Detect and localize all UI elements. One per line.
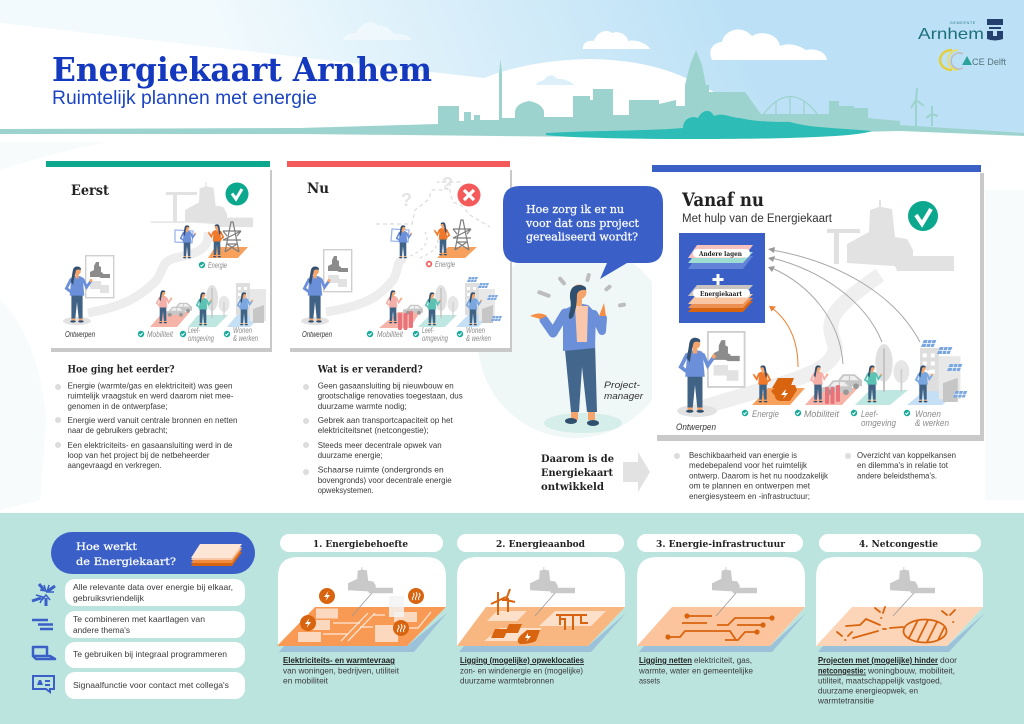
panel: Hoe werkt de Energiekaart: de Energiekaart? xyxy=(76,556,176,568)
layers diagram xyxy=(679,233,765,323)
text block: Hoe ging het eerder xyxy=(55,364,238,470)
figure: mobiliteit xyxy=(795,365,862,419)
text block: Hoe ging het eerder: Energie (warmte/gas en elektriciteit) was geen xyxy=(68,380,233,390)
row: kaartlagen: andere thema's xyxy=(73,625,130,635)
card 3: Energie-infrastructuur: 3. Energie-infrastructuur xyxy=(656,539,786,550)
row: signaalfunctie: Signaalfunctie voor contact met collega's xyxy=(73,680,229,690)
card 4: Netcongestie: warmtetransitie xyxy=(817,696,874,706)
figure: mobiliteit: Mobiliteit xyxy=(377,330,404,339)
icon: chat xyxy=(33,676,54,692)
text block: Vanaf nu bullets: Overzicht van koppelkansen xyxy=(857,450,956,460)
figure: ontwerper xyxy=(63,256,114,339)
header skyline illustration xyxy=(0,0,1024,142)
text block: Vanaf nu bullets: en dilemma's in relatie tot xyxy=(857,460,949,470)
project manager figure xyxy=(530,273,644,433)
text: Daarom is de Energiekaart ontwikkeld: ontwikkeld xyxy=(541,481,605,493)
text block: Vanaf nu bullets: om te plannen en ontwerpen met xyxy=(689,480,811,490)
row: programmeren: Te gebruiken bij integraal programmeren xyxy=(73,649,227,659)
row: signaalfunctie xyxy=(65,672,245,699)
figure: leefomgeving: omgeving xyxy=(861,418,896,428)
text block: Wat is er veranderd xyxy=(303,364,463,495)
row: data xyxy=(65,579,245,606)
project manager figure: manager xyxy=(604,391,644,402)
card 1: Energiebehoefte: Elektriciteits- en warmtevraag xyxy=(283,655,395,665)
text block: Hoe ging het eerder: aangevraagd en verkregen. xyxy=(68,460,162,470)
road and dashed city xyxy=(326,174,490,312)
figure: wonen en werken: & werken xyxy=(915,418,949,428)
text block: Hoe ging het eerder: loop van het project bij de netbeheerder xyxy=(68,450,210,460)
text block: Wat is er veranderd: duurzame energie; xyxy=(318,450,383,460)
figure: wonen en werken: Wonen xyxy=(466,326,485,335)
row: kaartlagen xyxy=(65,611,245,638)
card 4: Netcongestie: 4. Netcongestie xyxy=(859,539,938,550)
card 3: Energie-infrastructuur: elektriciteit, gas, xyxy=(694,655,752,665)
figure: energie xyxy=(175,222,248,270)
heading: Vanaf nu: Vanaf nu xyxy=(681,189,764,211)
text block: Hoe ging het eerder: genomen in de ontwerpfase; xyxy=(68,401,168,411)
card 2: Energieaanbod xyxy=(457,534,626,686)
speech bubble: gerealiseerd wordt? xyxy=(526,230,638,244)
card 4: Netcongestie: door xyxy=(940,655,957,665)
card 3: Energie-infrastructuur: Ligging netten xyxy=(639,655,692,665)
logo: CE Delft: CE Delft xyxy=(972,57,1006,68)
figure: mobiliteit: Mobiliteit xyxy=(147,330,174,339)
speech bubble: Hoe zorg ik er nu xyxy=(526,203,624,216)
figure: ontwerper: Ontwerpen xyxy=(302,330,332,339)
row: data: Alle relevante data over energie bij elkaar, xyxy=(73,582,233,592)
figure: leefomgeving: Leef- xyxy=(422,326,434,335)
figure: energie: Energie xyxy=(752,409,779,419)
card 3: Energie-infrastructuur xyxy=(637,534,806,686)
clouds xyxy=(343,22,827,85)
text block: Vanaf nu bullets xyxy=(674,450,956,501)
text block: Wat is er veranderd: Wat is er veranderd? xyxy=(317,364,423,376)
card 4: Netcongestie: duurzame energieopwek, en xyxy=(818,686,918,696)
figure: wonen en werken: Wonen xyxy=(915,409,941,419)
figure: ontwerper xyxy=(676,332,745,433)
text block: Wat is er veranderd: Gebrek aan transportcapaciteit op het xyxy=(318,415,453,425)
figure: wonen en werken: & werken xyxy=(233,334,258,343)
text block: Wat is er veranderd: grootschalige renovaties toegestaan, dus xyxy=(318,390,463,400)
figure: energie xyxy=(742,365,805,419)
text block: Hoe ging het eerder: Een elektriciteits- en gasaansluiting werd in de xyxy=(68,440,233,450)
text block: Wat is er veranderd: elektriciteitsnet (netcongestie); xyxy=(318,425,429,435)
text block: Hoe ging het eerder: naar de gebruikers gebracht; xyxy=(68,425,168,435)
text block: Vanaf nu bullets: medebepalend voor het ruimtelijk xyxy=(689,460,808,470)
figure: wonen en werken xyxy=(904,340,967,428)
layers diagram: Andere lagen xyxy=(698,250,742,258)
figure: wonen en werken: & werken xyxy=(466,334,491,343)
card 1: Energiebehoefte: 1. Energiebehoefte xyxy=(313,539,408,550)
logo: gemeente Arnhem: GEMEENTE xyxy=(950,21,976,25)
text block: Hoe ging het eerder: Hoe ging het eerder? xyxy=(68,364,174,376)
figure: leefomgeving: omgeving xyxy=(422,334,448,343)
figure: energie xyxy=(391,220,477,269)
panel: Hoe werkt de Energiekaart xyxy=(51,532,255,574)
text block: Vanaf nu bullets: andere beleidsthema's. xyxy=(857,470,937,480)
heading: Nu: Nu xyxy=(307,181,329,197)
text block: Wat is er veranderd: Geen gasaansluiting bij nieuwbouw en xyxy=(318,380,454,390)
text block: Wat is er veranderd: Schaarse ruimte (ondergronds en xyxy=(318,464,444,474)
card 2: Energieaanbod: zon- en windenergie en (mogelijke) xyxy=(460,666,583,676)
icon: check xyxy=(908,201,938,231)
card 4: Netcongestie: utiliteit, maatschappelijk vastgoed, xyxy=(818,676,942,686)
text: Daarom is de Energiekaart ontwikkeld: Daarom is de xyxy=(541,453,614,465)
project manager figure: Project- xyxy=(604,380,640,391)
text: Daarom is de Energiekaart ontwikkeld: Energiekaart xyxy=(541,467,613,479)
figure: wonen en werken xyxy=(224,283,266,343)
figure: leefomgeving xyxy=(851,344,909,428)
text block: Wat is er veranderd: opweksystemen. xyxy=(318,485,374,495)
figure: mobiliteit xyxy=(138,290,192,339)
icon: laptop xyxy=(33,647,55,659)
heading: Eerst: Eerst xyxy=(71,183,109,199)
arrows to layers xyxy=(768,247,920,367)
figure: leefomgeving xyxy=(180,285,230,343)
text block: Wat is er veranderd: Steeds meer decentrale opwek van xyxy=(318,440,442,450)
subtitle: Ruimtelijk plannen met energie xyxy=(52,88,317,109)
icon: lines xyxy=(32,620,53,629)
arrow xyxy=(623,452,650,492)
speech bubble xyxy=(503,186,663,279)
road and gray city xyxy=(695,200,954,410)
card 1: Energiebehoefte xyxy=(277,534,447,686)
figure: energie: Energie xyxy=(435,260,455,269)
logo: gemeente Arnhem xyxy=(918,19,1003,43)
subheading: Met hulp van de Energiekaart xyxy=(682,213,833,225)
figure: ontwerper xyxy=(301,250,352,339)
panel: Nu xyxy=(287,161,512,352)
row: data: gebruiksvriendelijk xyxy=(73,593,145,603)
road and dashed city: ? xyxy=(401,190,412,210)
icon: arrows inward xyxy=(32,584,55,606)
figure: leefomgeving xyxy=(413,285,458,343)
figure: energie: Energie xyxy=(208,261,227,270)
card 2: Energieaanbod: duurzame warmtebronnen xyxy=(460,676,554,686)
figure: leefomgeving: Leef- xyxy=(188,326,200,335)
figure: ontwerper: Ontwerpen xyxy=(676,422,716,433)
card 4: Netcongestie: netcongestie: xyxy=(818,666,866,676)
text block: Hoe ging het eerder: Energie werd vanuit centrale bronnen en netten xyxy=(68,415,238,425)
card 4: Netcongestie: woningbouw, mobiliteit, xyxy=(867,666,955,676)
figure: leefomgeving: omgeving xyxy=(188,334,214,343)
figure: ontwerper: Ontwerpen xyxy=(65,330,95,339)
logo: gemeente Arnhem: Arnhem xyxy=(918,26,984,43)
text block: Vanaf nu bullets: ontwerp. Daarom is het nu noodzakelijk xyxy=(689,470,829,480)
icon: layers xyxy=(191,544,242,566)
panel: Hoe werkt de Energiekaart: Hoe werkt xyxy=(76,541,138,553)
text block: Hoe ging het eerder: ruimtelijk vraagstuk en werd daarom niet mee- xyxy=(68,390,234,400)
text block: Vanaf nu bullets: energiesysteem en -infrastructuur; xyxy=(689,491,810,501)
speech bubble: voor dat ons project xyxy=(525,217,640,230)
title: Energiekaart Arnhem xyxy=(52,50,432,89)
figure: wonen en werken: Wonen xyxy=(233,326,252,335)
panel: Vanaf nu xyxy=(652,165,984,441)
text block: Wat is er veranderd: duurzame warmte nodig; xyxy=(318,401,407,411)
text block: Vanaf nu bullets: Beschikbaarheid van energie is xyxy=(689,450,797,460)
panel: Eerst xyxy=(46,161,272,352)
card 2: Energieaanbod: Ligging (mogelijke) opweklocaties xyxy=(460,655,584,665)
figure: mobiliteit: Mobiliteit xyxy=(804,409,839,419)
card 3: Energie-infrastructuur: assets xyxy=(639,676,660,686)
figure: wonen en werken xyxy=(456,277,502,343)
card 4: Netcongestie xyxy=(816,534,985,706)
card 1: Energiebehoefte: en mobiliteit xyxy=(283,676,329,686)
logo: CE Delft xyxy=(940,50,1006,70)
road and gray city xyxy=(88,182,253,313)
row: programmeren xyxy=(65,642,245,668)
road and dashed city: ? xyxy=(442,174,453,194)
layers diagram: Energiekaart xyxy=(700,290,742,298)
bottom band xyxy=(0,513,1024,724)
text block: Wat is er veranderd: bovengronds) voor decentrale energie xyxy=(318,475,452,485)
card 1: Energiebehoefte: van woningen, bedrijven, utiliteit xyxy=(283,666,400,676)
card 4: Netcongestie: Projecten met (mogelijke) hinder xyxy=(818,655,939,665)
icon: check xyxy=(226,182,248,206)
row: kaartlagen: Te combineren met kaartlagen van xyxy=(73,614,205,624)
text: Daarom is de Energiekaart ontwikkeld xyxy=(541,453,614,493)
icon: cross xyxy=(458,184,480,206)
card 3: Energie-infrastructuur: warmte, water en gemeentelijke xyxy=(638,666,753,676)
figure: mobiliteit xyxy=(367,290,423,339)
figure: leefomgeving: Leef- xyxy=(861,409,878,419)
card 2: Energieaanbod: 2. Energieaanbod xyxy=(496,539,585,550)
